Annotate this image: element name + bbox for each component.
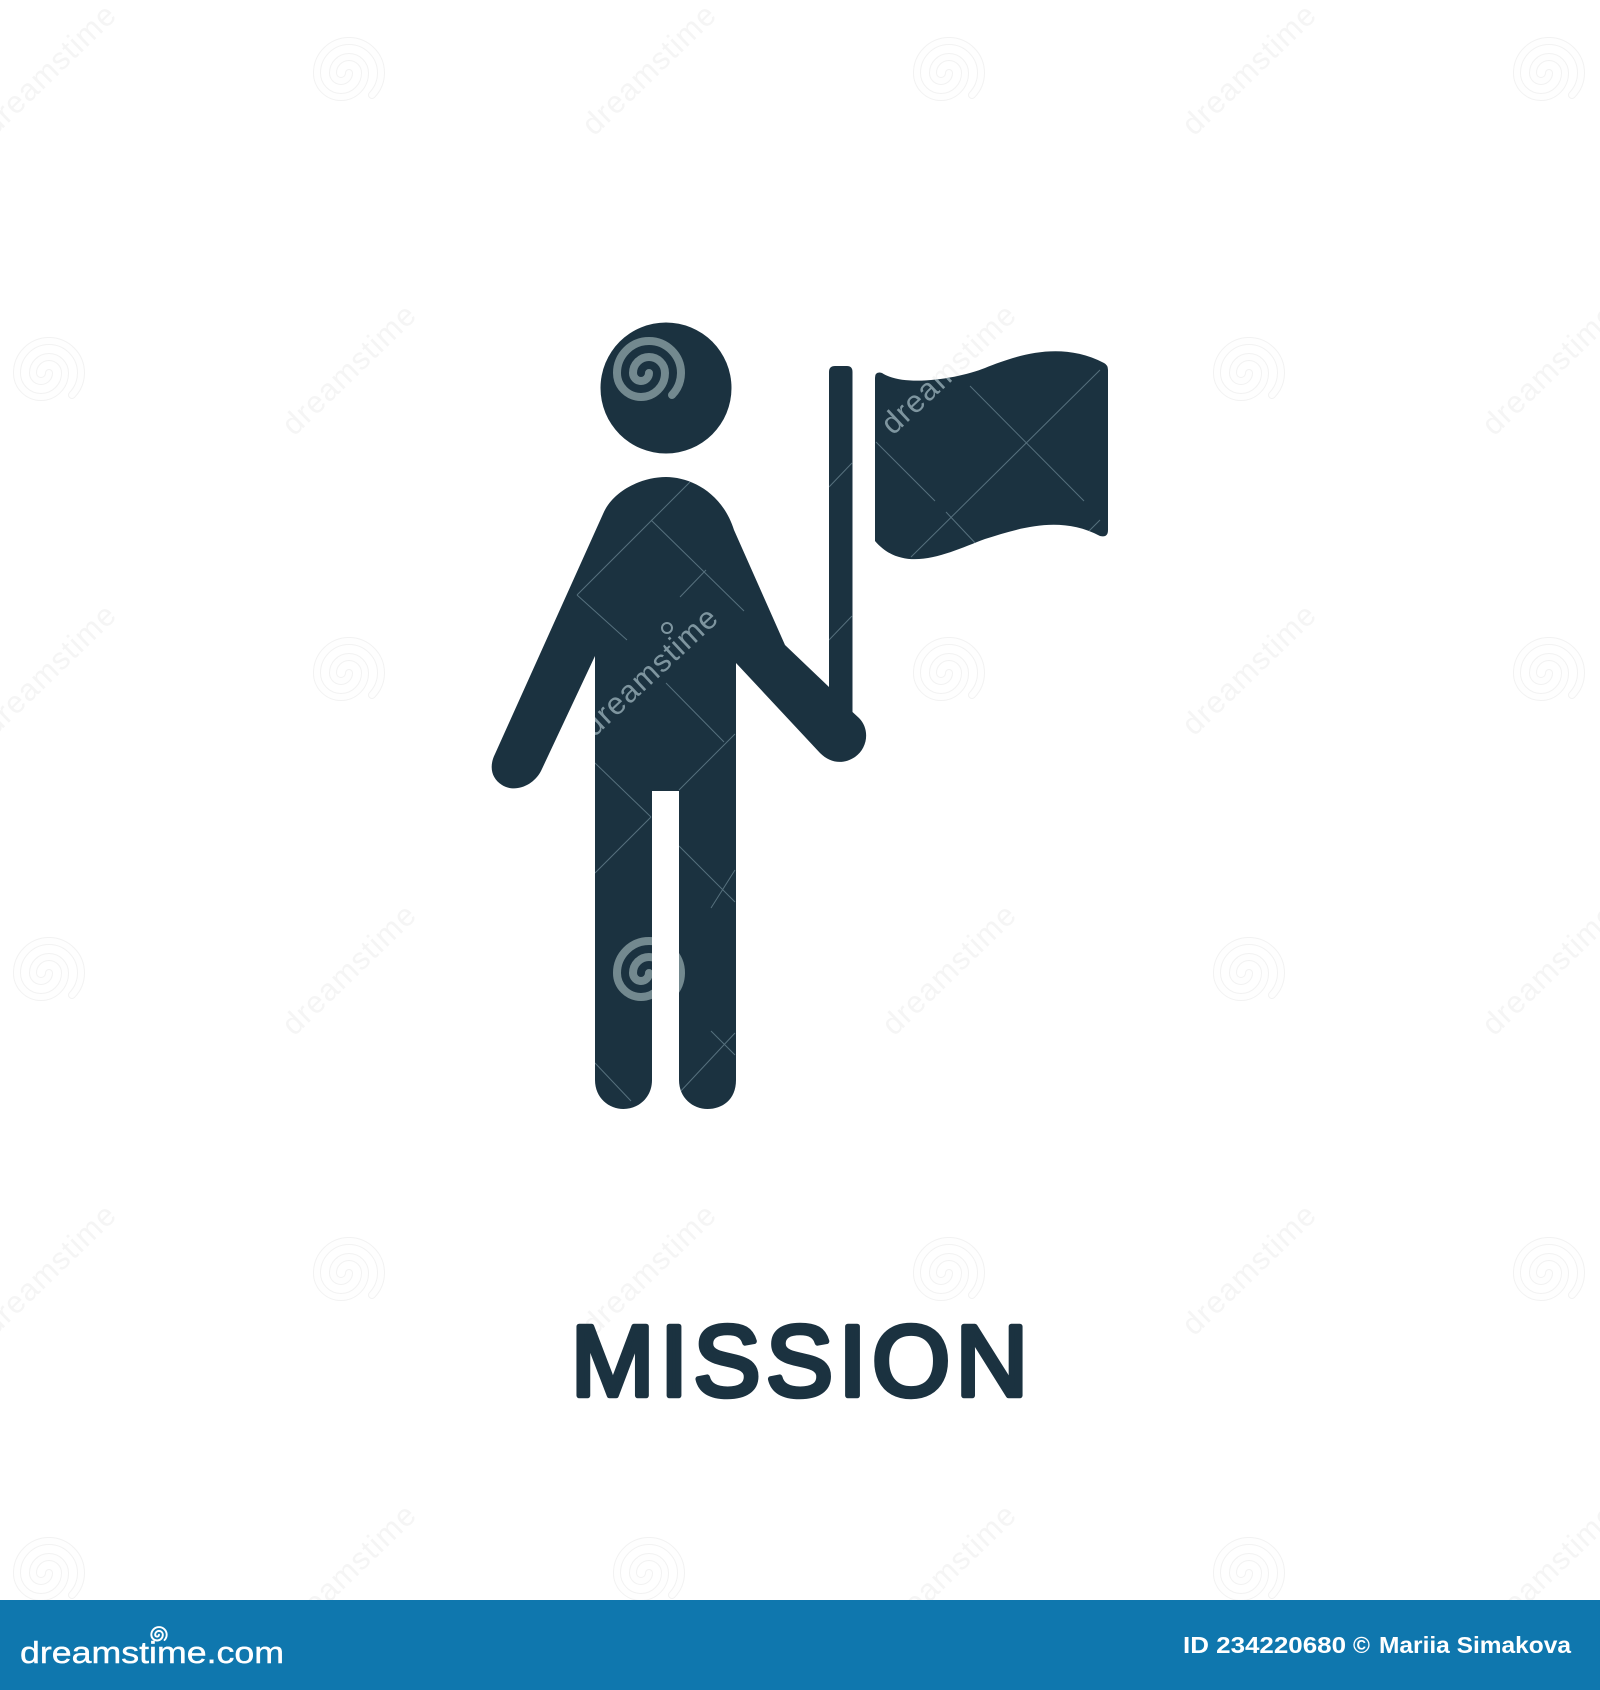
footer bar	[0, 1600, 1600, 1690]
watermark over icon: dreamstime	[575, 600, 724, 743]
watermark over icon	[575, 298, 1100, 1101]
footer credit: Mariia Simakova	[1379, 1632, 1571, 1658]
watermark pattern: dreamstime	[575, 1197, 723, 1342]
watermark pattern: dreamstime	[275, 297, 423, 442]
watermark pattern: dreamstime	[1175, 597, 1323, 742]
watermark pattern: dreamstime	[875, 297, 1023, 442]
watermark pattern: dreamstime	[1175, 0, 1323, 142]
icon: flag	[875, 351, 1108, 559]
footer logo: dreamstime.com	[20, 1635, 284, 1670]
title: MISSION	[571, 1306, 1028, 1418]
watermark over icon: dreamstime	[874, 298, 1023, 441]
watermark pattern: dreamstime	[275, 1497, 423, 1642]
footer credit: ©	[1353, 1632, 1370, 1658]
watermark pattern: dreamstime	[875, 897, 1023, 1042]
watermark pattern: dreamstime	[1175, 1197, 1323, 1342]
watermark pattern: dreamstime	[575, 0, 723, 142]
watermark pattern: dreamstime	[275, 897, 423, 1042]
icon: person body and flag pole	[492, 366, 866, 1109]
watermark pattern: dreamstime	[875, 1497, 1023, 1642]
footer credit: ID 234220680	[1183, 1632, 1346, 1658]
icon: person holding a flag	[492, 298, 1108, 1109]
icon: person head	[600, 322, 732, 454]
